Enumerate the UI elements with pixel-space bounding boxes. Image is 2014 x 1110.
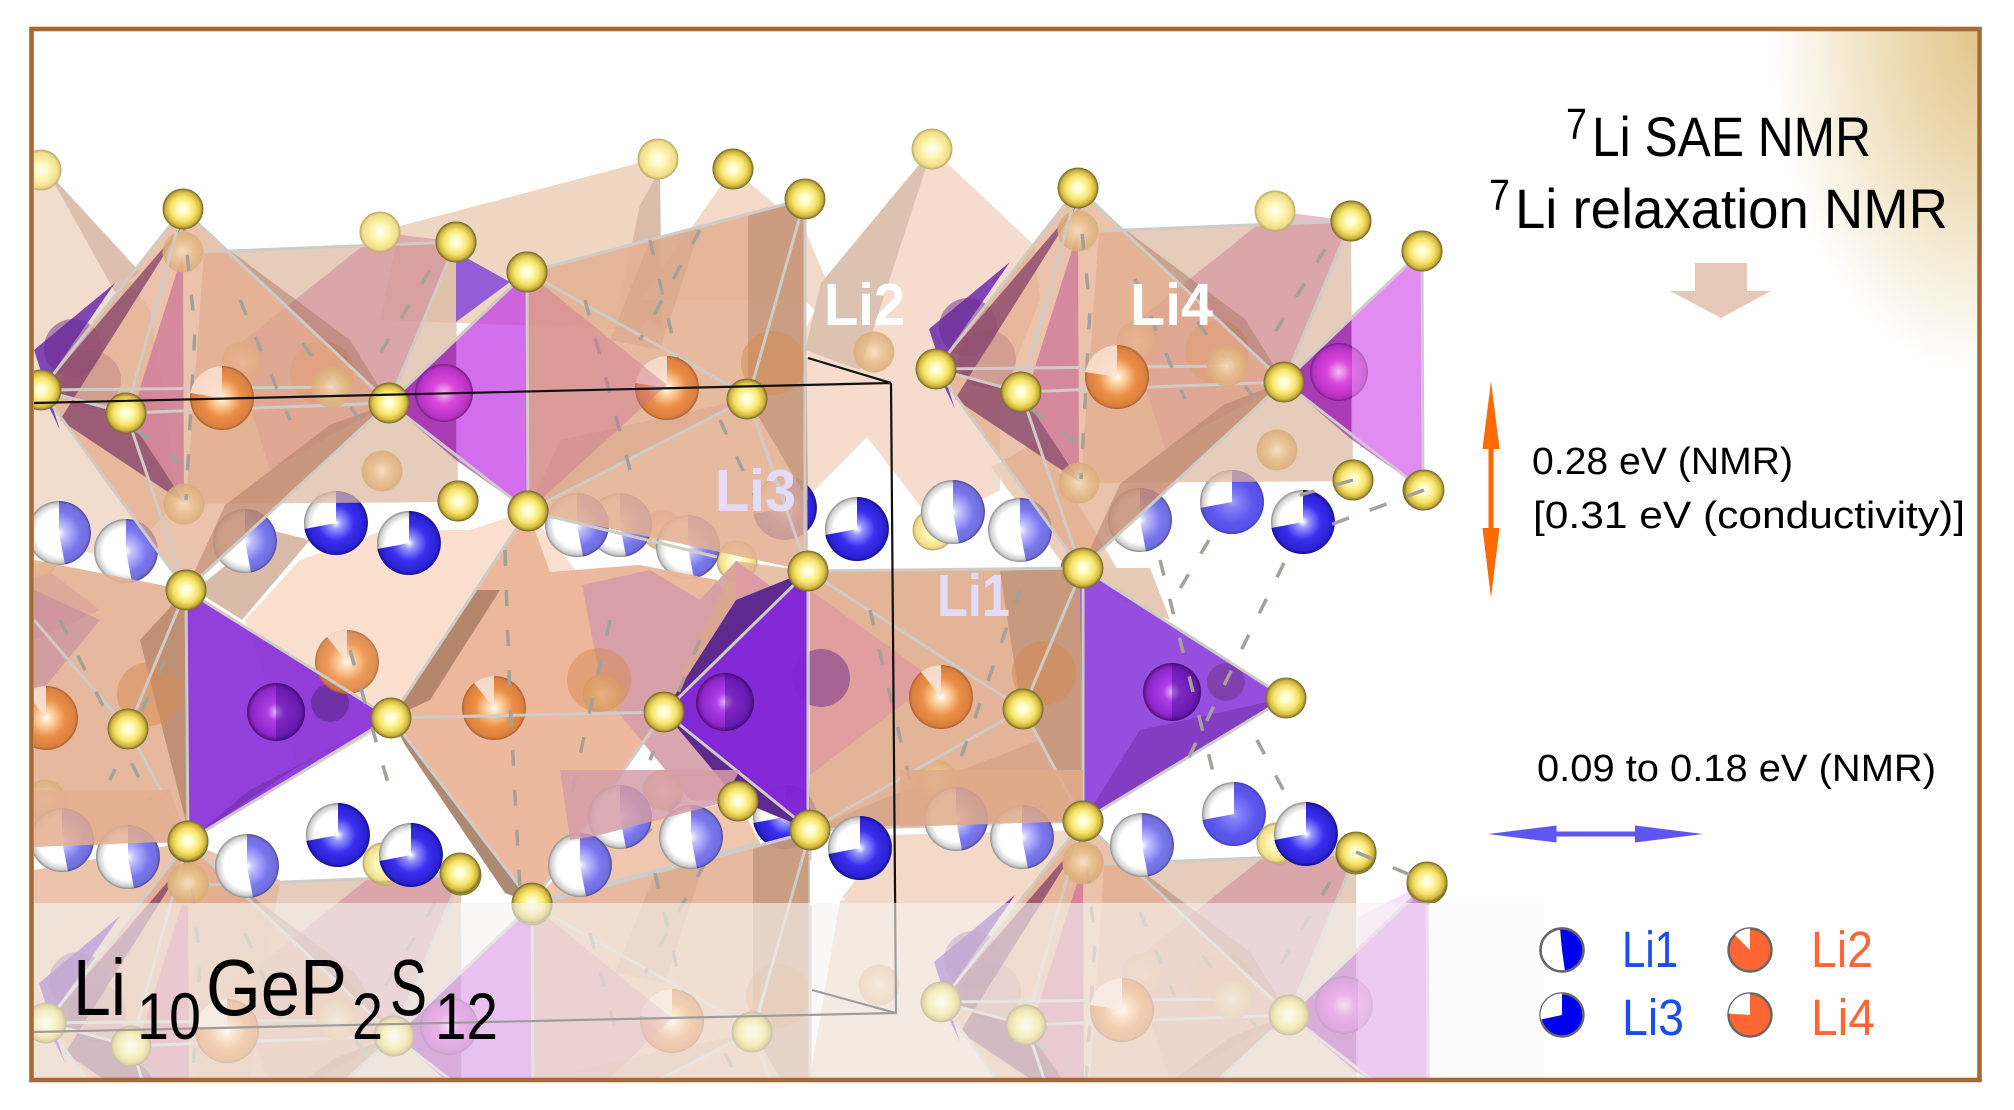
- legend Li3: [1540, 989, 1684, 1046]
- legend: [1540, 921, 1875, 1046]
- title formula: 10: [137, 979, 201, 1053]
- legend Li1: [1540, 921, 1678, 978]
- arrow: vertical orange: [1482, 381, 1500, 598]
- corner glow: [1765, 31, 1977, 365]
- Li spheres, upper channel: [27, 470, 1335, 583]
- title formula: Li: [73, 943, 126, 1032]
- title formula: S: [390, 943, 427, 1032]
- heading: methods: 7: [1489, 171, 1510, 220]
- front sulfur atoms, lower channel: [168, 780, 1448, 924]
- arrow: down: [1670, 263, 1771, 318]
- crystal structure: [14, 128, 1545, 1103]
- title formula: GeP: [206, 943, 347, 1032]
- label Li3: Li3: [715, 458, 796, 524]
- upper row polyhedra: [20, 148, 1444, 610]
- lower row polyhedra: [26, 800, 1448, 1103]
- Li sphere behind middle row: [362, 785, 1298, 884]
- heading: methods: Li relaxation NMR: [1515, 177, 1948, 240]
- dashed S-S links: [1300, 480, 1427, 882]
- heading: methods: [1489, 100, 1948, 240]
- label Li4: Li4: [1130, 272, 1213, 338]
- title formula: 12: [435, 979, 498, 1053]
- legend Li2: Li2: [1811, 921, 1873, 978]
- legend Li4: Li4: [1811, 989, 1875, 1046]
- legend Li1: Li1: [1622, 921, 1678, 978]
- arrow: horizontal blue: [1488, 826, 1703, 842]
- translucent formula band: [34, 903, 1434, 1078]
- back pale polyhedra: [18, 128, 1160, 775]
- middle row polyhedra: [14, 480, 1306, 903]
- label Li2: Li2: [824, 272, 905, 338]
- title formula: [73, 943, 498, 1053]
- legend Li3: Li3: [1622, 989, 1684, 1046]
- text: through-plane barrier: 0.28 eV (NMR): [1532, 441, 1793, 483]
- Li spheres, lower channel front: [30, 782, 1338, 898]
- text: in-plane barrier: 0.09 to 0.18 eV (NMR): [1537, 748, 1936, 790]
- site labels: [715, 272, 1213, 629]
- heading: methods: Li SAE NMR: [1592, 105, 1871, 168]
- heading: methods: 7: [1566, 100, 1587, 149]
- text: through-plane barrier: [1532, 441, 1965, 537]
- muted overlays on channel spheres: [34, 770, 1083, 847]
- label Li1: Li1: [937, 563, 1010, 629]
- title formula: 2: [352, 979, 383, 1053]
- text: through-plane barrier: [0.31 eV (conductivity)]: [1533, 495, 1965, 537]
- legend Li4: [1728, 989, 1875, 1046]
- legend Li2: [1728, 921, 1873, 978]
- unit cell outline: [34, 358, 896, 1032]
